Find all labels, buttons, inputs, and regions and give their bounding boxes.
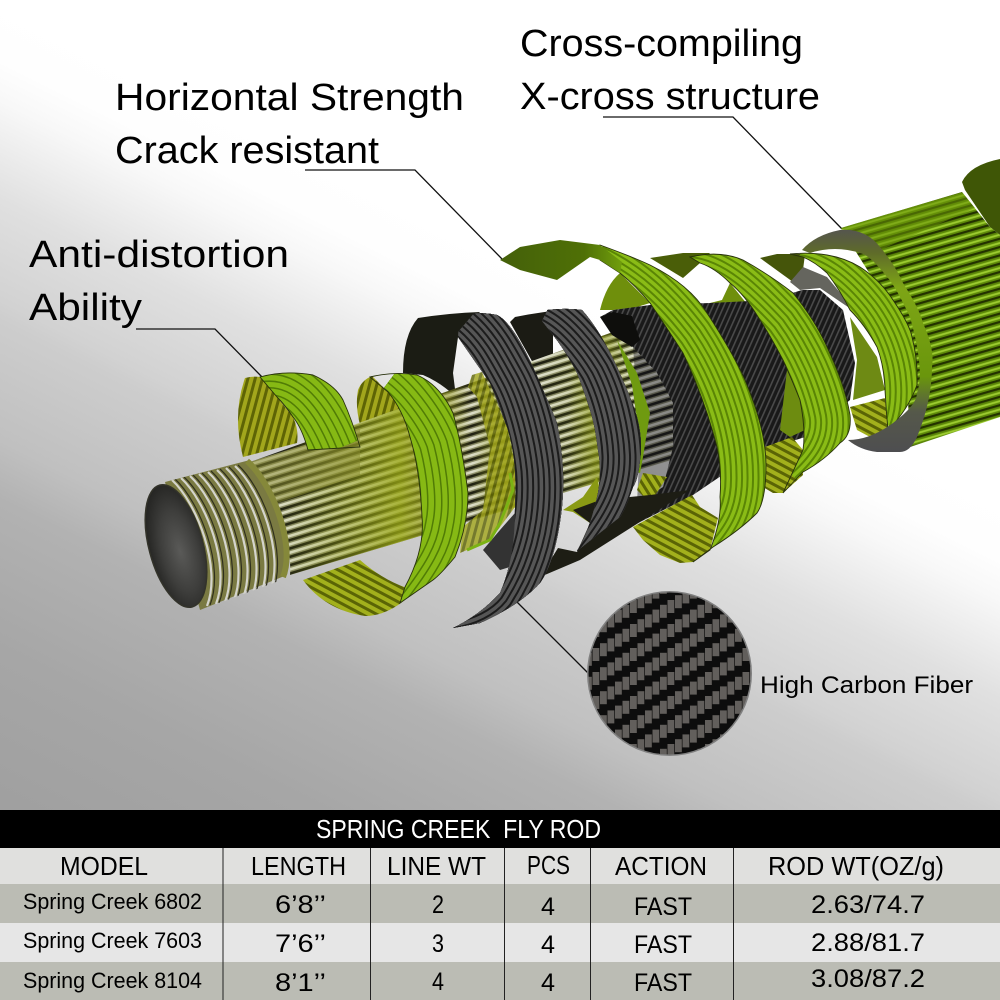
row: Spring Creek 7603: Spring Creek 7603 bbox=[23, 928, 202, 953]
row: Spring Creek 6802: 2.63/74.7 bbox=[811, 891, 925, 919]
illustration: fly rod cutaway bbox=[134, 159, 1000, 628]
olive band beside second black ribbon bbox=[617, 340, 650, 473]
table header row: MODEL bbox=[60, 851, 148, 881]
ribbon tip, dark olive bbox=[500, 240, 622, 280]
table header row: ROD WT(OZ/g) bbox=[768, 851, 944, 881]
threaded tip bbox=[134, 460, 288, 614]
top-right ribbon bump bbox=[962, 159, 1000, 235]
second black ribbon bbox=[545, 315, 619, 551]
table header row: LENGTH bbox=[251, 851, 346, 881]
label: horizontal strength: Crack resistant bbox=[115, 130, 379, 172]
row: Spring Creek 7603: 4 bbox=[541, 931, 555, 959]
label: cross-compiling: Cross-compiling bbox=[520, 23, 803, 65]
row: Spring Creek 8104 bbox=[23, 965, 925, 997]
row: Spring Creek 7603: 3 bbox=[432, 930, 444, 958]
translucent olive inner ribbon bbox=[460, 372, 515, 553]
second ribbon, green bbox=[370, 373, 468, 603]
row: Spring Creek 8104: 4 bbox=[432, 968, 444, 996]
table header row bbox=[60, 850, 944, 881]
label: horizontal strength bbox=[115, 77, 464, 172]
table header row: LINE WT bbox=[387, 851, 486, 881]
third green ribbon near ring bbox=[790, 253, 917, 430]
row: Spring Creek 7603: 7’6’’ bbox=[275, 930, 326, 958]
leader line: anti-distortion bbox=[136, 329, 263, 378]
darkened tube behind third band bbox=[633, 347, 673, 503]
row: Spring Creek 8104: Spring Creek 8104 bbox=[23, 968, 202, 993]
label: horizontal strength: Horizontal Strength bbox=[115, 77, 464, 119]
large green ribbon bbox=[600, 245, 766, 562]
row: Spring Creek 8104: 3.08/87.2 bbox=[811, 965, 925, 993]
thread end band bbox=[247, 461, 287, 577]
lower olive ribbon segments bbox=[633, 398, 888, 563]
table header row: PCS bbox=[527, 850, 570, 880]
label: cross-compiling bbox=[520, 23, 820, 118]
green rim on olive ribbon bbox=[467, 473, 513, 550]
row: Spring Creek 7603 bbox=[23, 928, 925, 959]
inner striped tube bbox=[250, 308, 680, 575]
table header row: ACTION bbox=[615, 851, 707, 881]
column separators bbox=[223, 848, 734, 1000]
end ring bbox=[802, 230, 933, 452]
row: Spring Creek 6802: 2 bbox=[432, 891, 444, 919]
first black ribbon bbox=[453, 318, 539, 628]
table row backgrounds bbox=[0, 848, 1000, 1000]
row: Spring Creek 6802 bbox=[23, 889, 925, 921]
spec table bbox=[0, 810, 1000, 1000]
dark lower ribbon base bbox=[540, 490, 690, 577]
middle green ribbon bbox=[690, 254, 850, 493]
back side of ribbons bbox=[238, 253, 805, 616]
row: Spring Creek 8104: 4 bbox=[541, 969, 555, 997]
row: Spring Creek 8104: 8’1’’ bbox=[275, 969, 326, 997]
row: Spring Creek 6802: FAST bbox=[634, 893, 692, 921]
row: Spring Creek 7603: 2.88/81.7 bbox=[811, 929, 925, 957]
outer green tube bbox=[841, 192, 1000, 447]
label: anti-distortion: Anti-distortion bbox=[29, 234, 289, 276]
row: Spring Creek 7603: FAST bbox=[634, 931, 692, 959]
table title bar bbox=[0, 810, 1000, 848]
olive rim between black ribbons bbox=[563, 477, 600, 523]
label: cross-compiling: X-cross structure bbox=[520, 76, 820, 118]
left ribbon, green bbox=[260, 373, 360, 450]
label: high carbon fiber: High Carbon Fiber bbox=[760, 672, 973, 699]
table title bar: SPRING CREEK FLY ROD bbox=[316, 814, 601, 844]
carbon fiber swatch bbox=[585, 590, 755, 760]
leader line: horizontal strength bbox=[305, 170, 503, 260]
label: anti-distortion bbox=[29, 234, 289, 329]
row: Spring Creek 6802: 6’8’’ bbox=[275, 891, 326, 919]
row: Spring Creek 6802: Spring Creek 6802 bbox=[23, 889, 202, 914]
row: Spring Creek 6802: 4 bbox=[541, 893, 555, 921]
lower dark back ribbon bbox=[483, 513, 520, 570]
leader line: carbon fiber bbox=[515, 600, 588, 673]
third black band and dark core bbox=[600, 267, 885, 530]
row: Spring Creek 8104: FAST bbox=[634, 969, 692, 997]
tube opening bbox=[134, 478, 218, 614]
label: anti-distortion: Ability bbox=[29, 287, 142, 329]
leader line: cross structure bbox=[603, 117, 842, 229]
